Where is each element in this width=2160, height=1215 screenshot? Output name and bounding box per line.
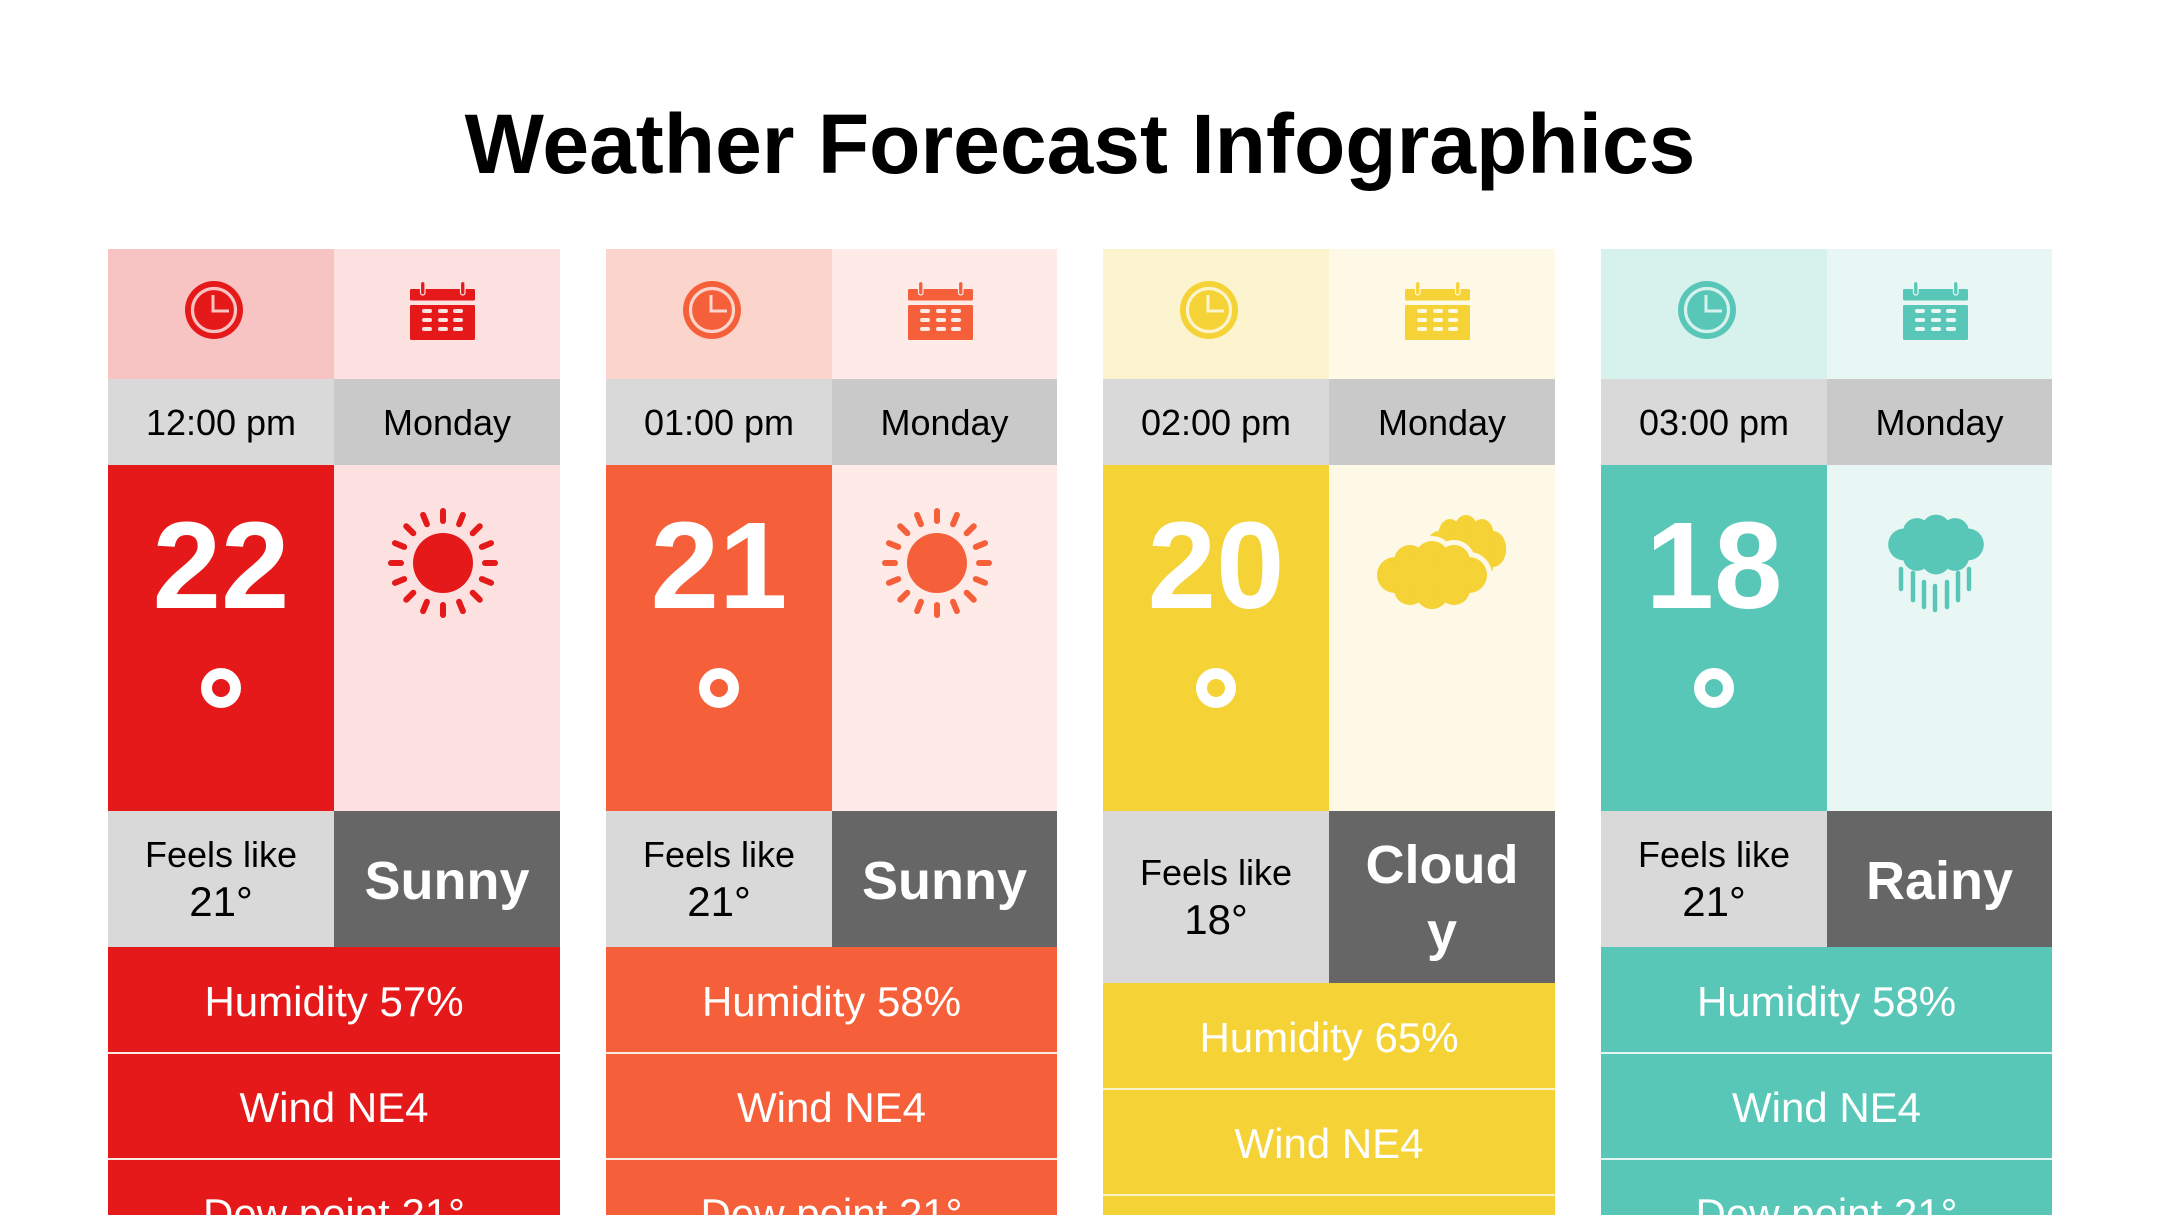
condition [1329, 811, 1555, 983]
feels like: Feels like [145, 834, 297, 875]
feels like: 21° [687, 878, 751, 925]
calendar icon cell [832, 249, 1057, 379]
clock icon cell [108, 249, 334, 379]
day label [832, 379, 1057, 465]
wind: Wind NE4 [239, 1084, 429, 1131]
degree ring [699, 668, 739, 708]
temperature value: 21 [651, 498, 787, 635]
time label [606, 379, 832, 465]
icon: sun [882, 508, 992, 618]
time label: 03:00 pm [1639, 402, 1789, 443]
condition [334, 811, 560, 947]
day label [1329, 379, 1555, 465]
time label [108, 379, 334, 465]
day label: Monday [1875, 402, 2004, 443]
wind: Wind NE4 [737, 1084, 926, 1131]
feels like [1601, 811, 1827, 947]
wind: Wind NE4 [1234, 1120, 1424, 1167]
clock icon cell [606, 249, 832, 379]
calendar icon cell [1329, 249, 1555, 379]
feels like: Feels like [1638, 834, 1790, 875]
temperature value: 18 [1646, 498, 1782, 635]
icon: clock [1180, 281, 1238, 339]
humidity: Humidity 58% [702, 978, 961, 1025]
day label [1827, 379, 2052, 465]
details list [606, 947, 1057, 1215]
icon: clock [1678, 281, 1736, 339]
time label: 01:00 pm [644, 402, 794, 443]
feels like [606, 811, 832, 947]
feels like: Feels like [643, 834, 795, 875]
condition: Rainy [1866, 851, 2013, 911]
icon: calendar [1405, 282, 1470, 340]
clock icon cell [1601, 249, 1827, 379]
humidity: Humidity 65% [1199, 1014, 1459, 1061]
panel: 01:00 pm forecast [606, 249, 1057, 1215]
temperature value: 20 [1148, 498, 1284, 635]
icon: calendar [908, 282, 973, 340]
weather icon cell [1329, 465, 1555, 811]
feels like: 21° [1682, 878, 1746, 925]
panel: 02:00 pm forecast [1103, 249, 1555, 1215]
icon: calendar [1903, 282, 1968, 340]
temperature value: 22 [153, 498, 289, 635]
time label [1601, 379, 1827, 465]
wind: Wind NE4 [1732, 1084, 1921, 1131]
degree ring [1196, 668, 1236, 708]
day label: Monday [880, 402, 1009, 443]
feels like: 21° [189, 878, 253, 925]
icon: clock [683, 281, 741, 339]
weather icon cell [334, 465, 560, 811]
title: Weather Forecast Infographics [465, 97, 1695, 191]
feels like [108, 811, 334, 947]
time label: 02:00 pm [1141, 402, 1291, 443]
humidity: Humidity 58% [1697, 978, 1956, 1025]
day label [334, 379, 560, 465]
day label: Monday [1378, 402, 1506, 443]
calendar icon cell [1827, 249, 2052, 379]
weather icon cell [1827, 465, 2052, 811]
icon: rain cloud [1888, 514, 1984, 612]
icon: sun [388, 508, 498, 618]
details list [1103, 983, 1555, 1215]
details list [1601, 947, 2052, 1215]
time label [1103, 379, 1329, 465]
icon: clouds [1377, 515, 1506, 609]
temperature block [1103, 465, 1329, 811]
condition: Sunny [364, 851, 530, 911]
icon: clock [185, 281, 243, 339]
condition: Cloud [1366, 835, 1518, 895]
feels like [1103, 811, 1329, 983]
time label: 12:00 pm [146, 402, 296, 443]
condition: Sunny [862, 851, 1027, 911]
details list [108, 947, 560, 1215]
degree ring [1694, 668, 1734, 708]
panel: 12:00 pm forecast [108, 249, 560, 1215]
temperature block [108, 465, 334, 811]
feels like: Feels like [1140, 852, 1292, 893]
clock icon cell [1103, 249, 1329, 379]
calendar icon cell [334, 249, 560, 379]
weather icon cell [832, 465, 1057, 811]
icon: calendar [410, 282, 475, 340]
condition [832, 811, 1057, 947]
degree ring [201, 668, 241, 708]
day label: Monday [383, 402, 511, 443]
temperature block [1601, 465, 1827, 811]
panel: 03:00 pm forecast [1601, 249, 2052, 1215]
condition: y [1427, 902, 1457, 962]
condition [1827, 811, 2052, 947]
feels like: 18° [1184, 896, 1248, 943]
humidity: Humidity 57% [204, 978, 464, 1025]
temperature block [606, 465, 832, 811]
